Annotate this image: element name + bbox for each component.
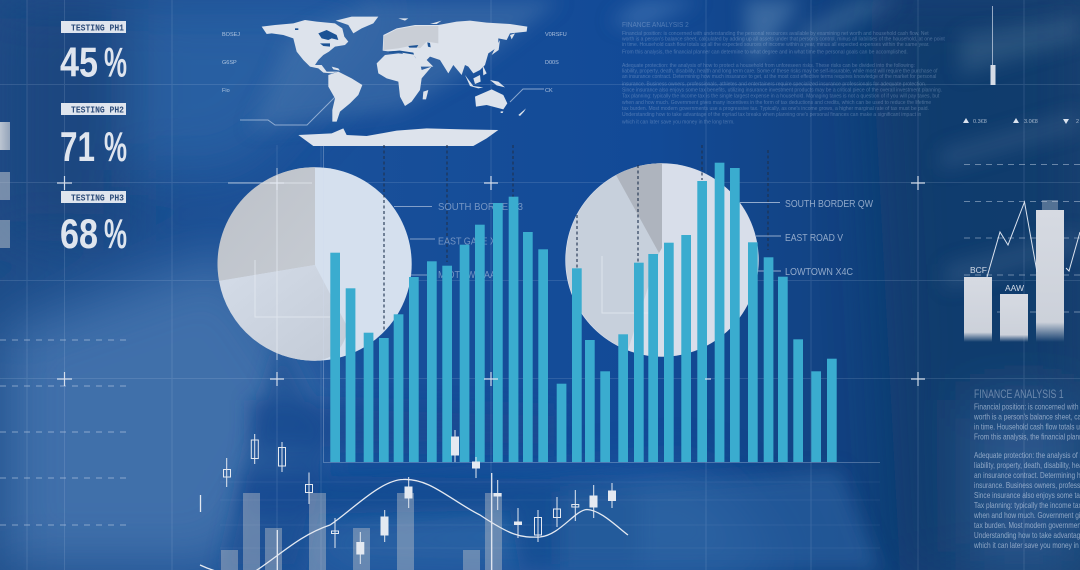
finance analysis 2 text block: an insurance contract. Determining how much insurance to get, at the most cost effective terms requires knowledge of the market for personal bbox=[622, 74, 936, 80]
map side labels: CK bbox=[545, 88, 553, 94]
testing PH2 value: % bbox=[104, 123, 127, 170]
side tabs left bbox=[0, 122, 10, 248]
trend indicators: 0.3€8 bbox=[973, 119, 987, 125]
testing PH2 value: 71 bbox=[60, 123, 95, 170]
finance analysis 1 text block bbox=[973, 389, 1080, 550]
testing PH2 label: TESTING PH2 bbox=[71, 104, 124, 116]
right pie labels: LOWTOWN X4C bbox=[785, 266, 853, 278]
testing PH3 value: 68 bbox=[60, 210, 98, 257]
map side labels: Fio bbox=[222, 88, 230, 94]
finance analysis 2 text block: tax burden. Most modern governments use a progressive tax. Typically, as one's income grows, a higher marginal rate of tax must be paid. bbox=[622, 106, 929, 112]
map side labels bbox=[222, 32, 567, 94]
right pie labels: EAST ROAD V bbox=[785, 232, 843, 244]
testing PH1 value bbox=[60, 38, 127, 86]
dashed guide lines right bbox=[964, 164, 1080, 312]
testing PH2 label bbox=[61, 103, 126, 116]
finance analysis 2 text block: Since insurance also enjoys some tax benefits, utilizing insurance investment products may be a critical piece of the overall investment planning. bbox=[622, 87, 942, 94]
panel: testing percentages bbox=[60, 21, 127, 257]
finance analysis 2 text block: when and how much. Government gives many incentives in the form of tax deductions and credits, which can be used to reduce the lifetime bbox=[622, 100, 931, 106]
main bar chart bbox=[330, 163, 837, 462]
finance analysis 2 text block: which it can later save you money in the long term. bbox=[622, 119, 735, 126]
finance analysis 2 text block bbox=[622, 22, 945, 126]
dashed guide lines left bbox=[0, 340, 130, 525]
map side labels: D00S bbox=[545, 60, 559, 66]
bar chart axis bbox=[324, 145, 880, 462]
right pie labels bbox=[740, 198, 873, 278]
finance analysis 2 text block: Financial position: is concerned with understanding the personal resources available by examining net worth and household cash flow. Net bbox=[622, 31, 929, 37]
testing PH1 value: % bbox=[104, 38, 127, 86]
left pie labels bbox=[394, 201, 523, 281]
left pie labels: SOUTH BORDER 3 bbox=[438, 201, 523, 213]
testing PH1 value: 45 bbox=[60, 38, 98, 86]
finance analysis 2 text block: Understanding how to take advantage of the myriad tax breaks when planning one's personal finances can make a significant impact in bbox=[622, 112, 921, 118]
finance analysis 2 text block: Tax planning: typically the income tax is the single largest expense in a household. Managing taxes is not a question of if you will pay taxes, but bbox=[622, 93, 940, 100]
right bar chart bbox=[964, 200, 1064, 342]
right pie labels: SOUTH BORDER QW bbox=[785, 198, 873, 210]
testing PH3 label: TESTING PH3 bbox=[71, 192, 124, 204]
finance analysis 1 text block: FINANCE ANALYSIS 1 bbox=[974, 389, 1064, 401]
testing PH3 value: % bbox=[104, 210, 127, 257]
finance analysis 2 text block: in time. Household cash flow totals up all the expected sources of income within a year, minus all expected expenses within the same year. bbox=[622, 42, 930, 48]
top right candlestick bbox=[990, 6, 996, 85]
trend indicators: 3.0€8 bbox=[1024, 119, 1038, 125]
finance analysis 2 text block: worth is a person's balance sheet, calculated by adding up all assets under that person's control, minus all liabilities of the household, at one point bbox=[622, 36, 945, 43]
right trend line bbox=[987, 202, 1080, 277]
map leader lines bbox=[240, 89, 544, 125]
world map bbox=[262, 17, 527, 146]
testing PH3 value bbox=[60, 210, 127, 257]
finance analysis 2 text block: FINANCE ANALYSIS 2 bbox=[622, 22, 689, 29]
finance analysis 2 text block: From this analysis, the financial planner can determine to what degree and in what time the personal goals can be accomplished. bbox=[622, 49, 908, 56]
finance analysis 2 text block: liability, property, death, disability, health and long term care. Some of these risks may be self-insurable, while most will require the purchase of bbox=[622, 68, 938, 75]
candlestick chart bbox=[200, 430, 616, 570]
left pie labels: MIDTOWN AA bbox=[438, 269, 496, 281]
finance analysis 2 text block: Adequate protection: the analysis of how to protect a household from unforeseen risks. These risks can be divided into the following: bbox=[622, 63, 915, 69]
testing PH3 label bbox=[61, 191, 126, 204]
testing PH2 value bbox=[60, 123, 127, 170]
left pie labels: EAST GATE X bbox=[438, 236, 496, 248]
map side labels: BOSEJ bbox=[222, 32, 240, 38]
map side labels: G6SP bbox=[222, 60, 237, 66]
wave line chart bbox=[200, 479, 628, 570]
right bar chart: AAW bbox=[1005, 283, 1024, 293]
trend indicators bbox=[963, 118, 1079, 125]
pie chart left bbox=[217, 167, 412, 361]
pie chart right bbox=[565, 163, 759, 357]
dashed drop lines bbox=[384, 145, 768, 332]
finance analysis 2 text block: insurance. Business owners, professionals, athletes and entertainers require specialized insurance professionals for adequate protection. bbox=[622, 81, 926, 88]
trend indicators: 2 bbox=[1076, 119, 1079, 125]
map side labels: V0RSFU bbox=[545, 32, 567, 38]
testing PH1 label bbox=[61, 21, 126, 34]
crosshair markers bbox=[57, 176, 925, 386]
right bar chart: BCF bbox=[970, 265, 987, 275]
translucent bottom bars bbox=[221, 493, 502, 570]
testing PH1 label: TESTING PH1 bbox=[71, 22, 124, 34]
